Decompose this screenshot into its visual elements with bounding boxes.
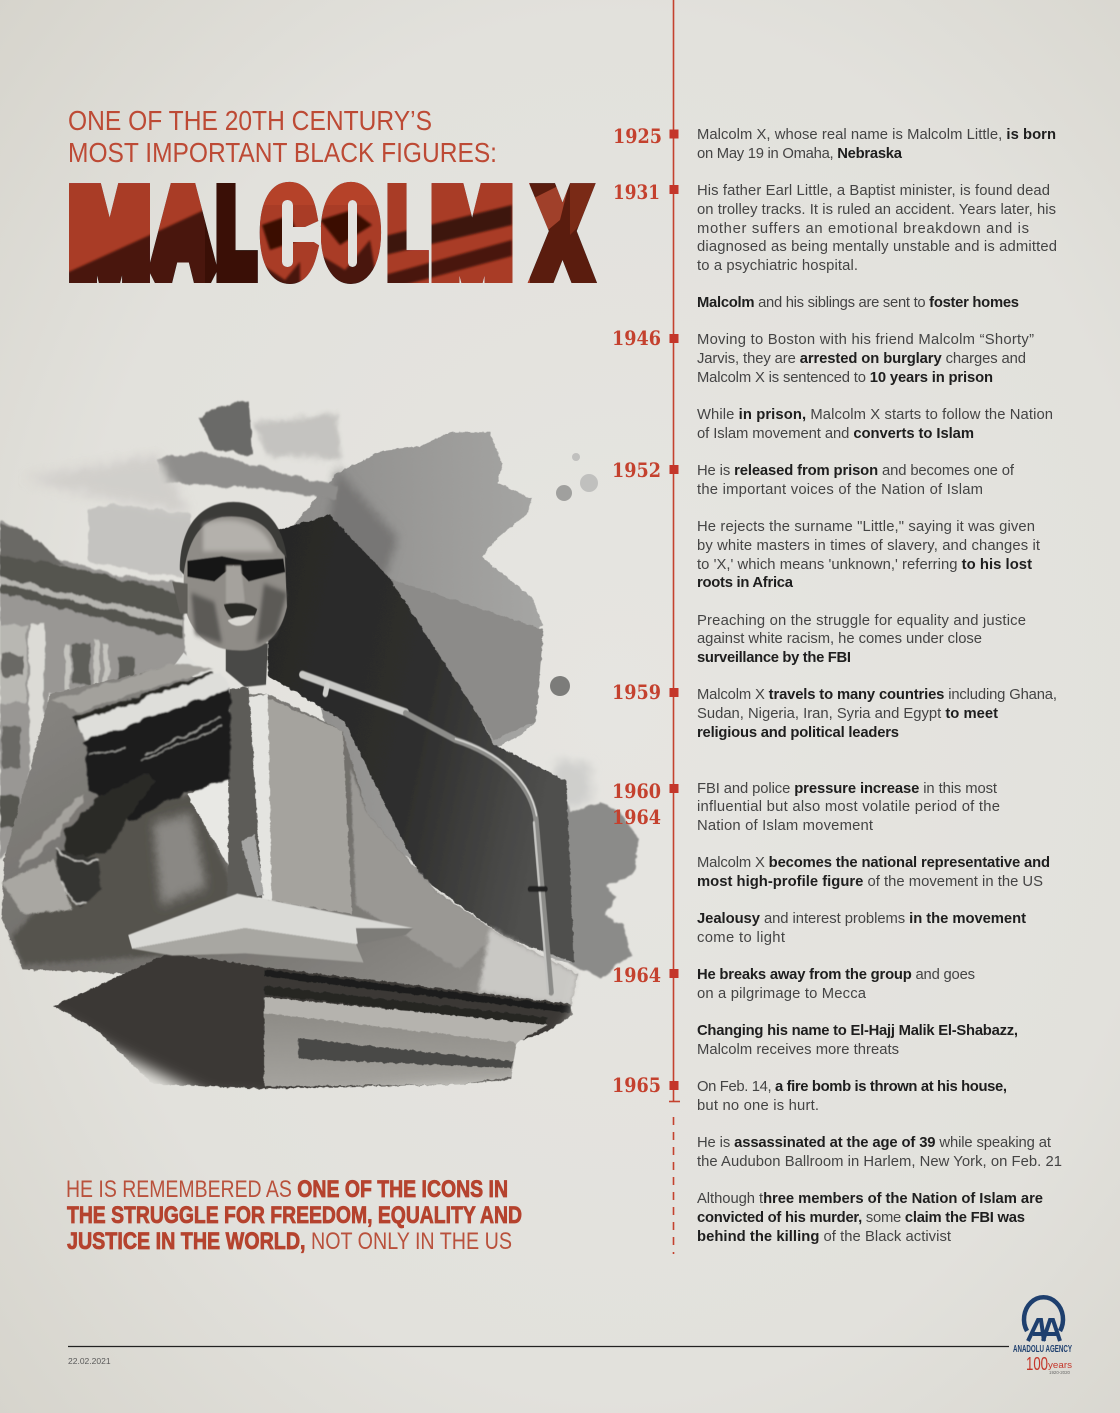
top smudges [23,400,341,579]
year labels: 1965 [612,1073,661,1097]
text block: 1965: Although three members of the Nation of Islam are [697,1191,1043,1207]
text block: 1959 [697,687,1057,741]
text block: 1925: Malcolm X, whose real name is Malcolm Little, is born [697,127,1056,143]
closing statement: THE STRUGGLE FOR FREEDOM, EQUALITY AND [67,1202,522,1229]
text block: 1931: mother suffers an emotional breakdown and is [697,221,1029,237]
timeline markers [670,130,678,1090]
text block: 1965 [697,1079,1062,1245]
text block: 1952 [697,463,1040,666]
text block: 1946: Jarvis, they are arrested on burglary charges and [697,351,1026,367]
text block: 1965: On Feb. 14, a fire bomb is thrown at his house, [697,1079,1007,1095]
text block: 1952: the important voices of the Nation of Islam [697,482,983,498]
suit jacket [2,666,578,1011]
text block: 1964 [697,967,1018,1058]
text block: 1925: on May 19 in Omaha, Nebraska [697,146,903,162]
year labels: 1925 [613,124,662,148]
text block: 1960-1964: Nation of Islam movement [697,818,873,834]
footer rule [68,1346,1009,1348]
text block: 1952: surveillance by the FBI [697,650,851,666]
logo: Anadolu Agency [1013,1297,1072,1375]
logo: Anadolu Agency: 1920-2020 [1049,1370,1070,1375]
blurred building on the left [0,519,188,859]
text block: 1960-1964: FBI and police pressure increase in this most [697,781,997,797]
text block: 1931: diagnosed as being mentally unstable and is admitted [697,239,1057,255]
text block: 1959: Sudan, Nigeria, Iran, Syria and Egypt to meet [697,706,998,722]
photo texture seen through the title letters [60,176,605,291]
text block: 1952: roots in Africa [697,575,794,591]
text block: 1931: on trolley tracks. It is ruled an accident. Years later, his [697,202,1056,218]
text block: 1952: by white masters in times of slavery, and changes it [697,538,1040,554]
heading: MALCOLM X: L [218,168,254,298]
text block: 1952: to 'X,' which means 'unknown,' referring to his lost [697,557,1032,573]
year labels: 1960 [612,779,661,803]
text block: 1952: Preaching on the struggle for equality and justice [697,613,1026,629]
logo: Anadolu Agency: 100 [1026,1354,1048,1374]
microphone stand [302,675,551,992]
text block: 1960-1964 [697,781,1050,946]
timeline axis [669,0,680,1254]
text block: 1952: He is released from prison and becomes one of [697,463,1015,479]
text block: 1946: Malcolm X is sentenced to 10 years in prison [697,370,993,386]
text block: 1965: the Audubon Ballroom in Harlem, New York, on Feb. 21 [697,1154,1062,1170]
text block: 1960-1964: most high-profile figure of the movement in the US [697,874,1043,890]
closing statement: HE IS REMEMBERED AS ONE OF THE ICONS IN [66,1176,508,1203]
ink wash behind the figure [268,432,574,963]
heading: MALCOLM X: M [433,169,511,298]
text block: 1960-1964: Malcolm X becomes the national representative and [697,855,1050,871]
ink splatter dots [550,453,598,696]
text block: 1959: Malcolm X travels to many countries including Ghana, [697,687,1057,703]
heading: MALCOLM X: A [153,170,213,298]
text block: 1952: against white racism, he comes under close [697,631,982,647]
heading: MALCOLM X: M [71,169,148,298]
icon: AA arc [1024,1297,1063,1341]
photo: Malcolm X speaking at a lectern [0,400,578,1089]
year labels: 1946 [612,326,661,350]
text block: 1964: Malcolm receives more threats [697,1042,899,1058]
text block: 1931: to a psychiatric hospital. [697,258,858,274]
text block: 1960-1964: Jealousy and interest problems in the movement [697,911,1026,927]
heading: MALCOLM X: X [539,170,586,298]
text block: 1959: religious and political leaders [697,725,899,741]
closing statement: JUSTICE IN THE WORLD, NOT ONLY IN THE US [67,1228,512,1255]
open book on lectern [128,894,413,963]
year labels: 1964 [612,805,661,829]
closing statement [66,1176,522,1255]
text block: 1965: behind the killing of the Black activist [697,1229,951,1245]
text block: 1946: Moving to Boston with his friend Malcolm “Shorty” [697,332,1034,348]
text block: 1960-1964: come to light [697,930,785,946]
year labels: 1959 [612,680,661,704]
text block: 1965: He is assassinated at the age of 39 while speaking at [697,1135,1051,1151]
heading: MALCOLM X: L [389,168,425,298]
heading: kicker: MOST IMPORTANT BLACK FIGURES: [68,137,497,168]
text block: 1964: on a pilgrimage to Mecca [697,986,867,1002]
ink wash reaching under the year labels [540,760,640,978]
text block: 1965: convicted of his murder, some claim the FBI was [697,1210,1025,1226]
lectern [54,953,572,1089]
year labels: 1931 [613,180,660,204]
text block: 1965: but no one is hurt. [697,1098,819,1114]
text block: 1964: Changing his name to El-Hajj Malik El-Shabazz, [697,1023,1018,1039]
heading: MALCOLM X [71,168,586,298]
text block: 1931: His father Earl Little, a Baptist minister, is found dead [697,183,1050,199]
heading: kicker: ONE OF THE 20TH CENTURY’S [68,105,432,136]
year labels: 1952 [612,458,661,482]
text block: 1931 [697,183,1057,311]
year labels [612,124,662,1097]
text block: 1952: He rejects the surname "Little," saying it was given [697,519,1035,535]
raised book, hand and cuff [18,665,230,908]
text block: 1946: of Islam movement and converts to Islam [697,426,974,442]
text block: 1960-1964: influential but also most volatile period of the [697,799,1000,815]
text block: 1946 [697,332,1053,442]
title letter counters: narrow slots in C and O [270,195,370,273]
year labels: 1964 [612,963,661,987]
heading: MALCOLM X: C [263,169,313,298]
logo: Anadolu Agency: ANADOLU AGENCY [1013,1343,1072,1355]
date: 22.02.2021 [68,1356,111,1366]
heading: kicker [68,105,497,168]
heading: MALCOLM X: O [324,169,378,298]
head and neck [170,502,287,687]
text block: 1931: Malcolm and his siblings are sent to foster homes [697,295,1019,311]
text block: 1925 [697,127,1056,162]
text block: 1964: He breaks away from the group and goes [697,967,975,983]
text block: 1946: While in prison, Malcolm X starts to follow the Nation [697,407,1053,423]
logo: Anadolu Agency: years [1048,1360,1072,1371]
